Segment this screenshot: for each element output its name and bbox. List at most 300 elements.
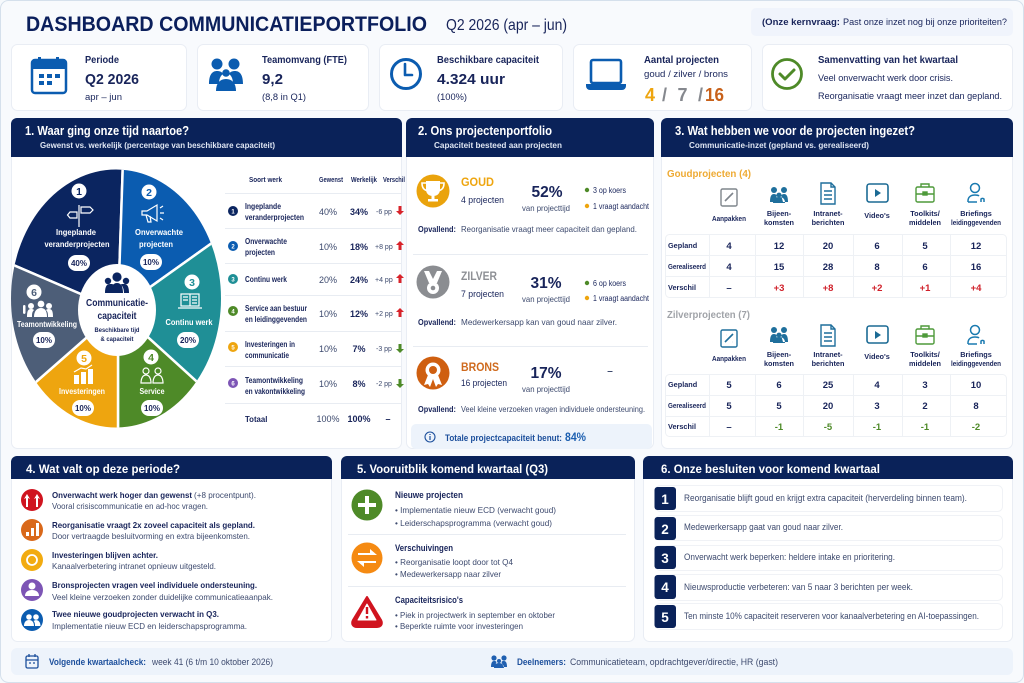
- row 1: 34%: [350, 207, 368, 217]
- row 5: 5: [231, 346, 235, 352]
- decision 4: 4: [661, 580, 669, 595]
- zilver table: –: [726, 422, 732, 433]
- label 1: 40%: [71, 259, 87, 268]
- panel 1: tijdsbesteding: [0, 118, 405, 448]
- goud column labels: Intranet-: [813, 209, 843, 218]
- panel 2: projectenportfolio: [406, 118, 654, 449]
- goud: [416, 174, 650, 234]
- panel 6: besluiten: [643, 456, 1013, 642]
- label 3: 20%: [180, 336, 196, 345]
- row 4: +2 pp: [375, 311, 393, 318]
- zilver: Medewerkersapp kan van goud naar zilver.: [461, 317, 617, 327]
- panel 1 header: [11, 118, 402, 157]
- total row: Totaal: [245, 415, 267, 424]
- icon: briefing: [968, 184, 984, 202]
- panel 3: communicatie-inzet: [661, 118, 1013, 448]
- panel 3 header: 3. Wat hebben we voor de projecten ingezet?: [675, 124, 915, 138]
- panel 2 header: Capaciteit besteed aan projecten: [434, 141, 562, 150]
- zilver table: 3: [922, 380, 928, 391]
- goud table: [665, 234, 1006, 298]
- stat card: samenvatting: Veel onverwacht werk door crisis.: [818, 73, 953, 83]
- label 4: [140, 350, 165, 416]
- total capacity callout: Totale projectcapaciteit benut:: [445, 433, 562, 443]
- table header row: Verschil: [383, 175, 405, 184]
- item 3: Investeringen blijven achter.: [52, 550, 158, 560]
- row 5: -3 pp: [376, 346, 392, 353]
- row 2: projecten: [245, 248, 275, 257]
- panel 4: wat valt op: [11, 456, 332, 642]
- zilver: [416, 266, 650, 327]
- nieuwe projecten: Nieuwe projecten: [395, 490, 463, 500]
- key question callout: (Onze kernvraag:: [762, 17, 840, 28]
- decision 4: Nieuwsproductie verbeteren: van 5 naar 3 berichten per week.: [684, 582, 913, 592]
- zilver table: Gerealiseerd: [668, 401, 706, 410]
- goud table: 4: [726, 262, 732, 273]
- row 6: 6: [231, 382, 235, 388]
- table header row: Soort werk: [249, 175, 283, 184]
- row 3: 24%: [350, 275, 368, 285]
- row 1: 40%: [319, 207, 337, 217]
- key question callout: [751, 8, 1013, 36]
- footer bar: Volgende kwartaalcheck:: [49, 657, 146, 667]
- panel 5: vooruitblik: [341, 456, 635, 642]
- stat card: capaciteit: [380, 44, 562, 110]
- goud table: 5: [922, 241, 928, 252]
- item 5: Twee nieuwe goudprojecten verwacht in Q3.: [52, 609, 219, 619]
- zilver column labels: Toolkits/: [910, 350, 940, 359]
- item 1: Vooral crisiscommunicatie en ad-hoc vragen.: [52, 501, 208, 511]
- row 2: 10%: [319, 242, 337, 252]
- row 1: -6 pp: [376, 209, 392, 216]
- label 4: 10%: [144, 404, 160, 413]
- zilver table: 5: [726, 401, 732, 412]
- verschuivingen: Verschuivingen: [395, 543, 453, 553]
- goud table: 12: [774, 241, 784, 252]
- goud: 1 vraagt aandacht: [593, 202, 650, 211]
- stat card: aantal projecten: 4: [645, 85, 655, 105]
- zilver: van projecttijd: [522, 294, 570, 304]
- icon: trophy: [416, 174, 450, 208]
- label 4: Service: [140, 387, 165, 396]
- nieuwe projecten: [352, 490, 556, 528]
- zilver table: 2: [922, 401, 928, 412]
- stat card: samenvatting: Samenvatting van het kwartaal: [818, 55, 958, 66]
- label 1: Ingeplande: [56, 228, 97, 237]
- label 2: 10%: [143, 258, 159, 267]
- zilver table: -1: [775, 422, 784, 433]
- icon: toolkit: [916, 184, 934, 202]
- row 2: [228, 237, 404, 257]
- stat card: samenvatting: [762, 44, 1012, 110]
- total row: –: [385, 414, 391, 424]
- zilver table: 5: [726, 380, 732, 391]
- row 4: 4: [231, 310, 235, 316]
- icon: rosette: [416, 356, 450, 390]
- footer bar: week 41 (6 t/m 10 oktober 2026): [151, 657, 273, 667]
- zilver: 7 projecten: [461, 289, 504, 300]
- goud table: 15: [774, 262, 785, 273]
- zilver: 1 vraagt aandacht: [593, 294, 650, 303]
- item 4: Veel kleine verzoeken zonder duidelijke communicatieaanpak.: [52, 592, 273, 602]
- title: DASHBOARD COMMUNICATIEPORTFOLIO: [26, 12, 427, 36]
- goud table: 4: [726, 241, 732, 252]
- label 5: 5: [81, 353, 87, 365]
- panel 3 header: [661, 118, 1013, 157]
- row 6: Teamontwikkeling: [245, 376, 303, 385]
- item 1: (+8 procentpunt).: [194, 490, 256, 500]
- zilver table: 4: [874, 380, 880, 391]
- icon: bijeenkomsten zilver: [770, 327, 788, 343]
- decision 3: [654, 546, 1002, 570]
- row 2: +8 pp: [375, 244, 393, 251]
- zilver table: 10: [971, 380, 981, 391]
- stat card: periode: [12, 44, 186, 110]
- icon: laptop: [586, 60, 626, 90]
- icon: toolkit zilver: [916, 326, 934, 344]
- zilver: 6 op koers: [593, 279, 626, 288]
- zilver column labels: Briefings: [960, 350, 992, 359]
- row 6: 10%: [319, 379, 337, 389]
- icon: medal: [416, 266, 450, 298]
- label 2: projecten: [139, 240, 173, 249]
- goud table: Gerealiseerd: [668, 262, 706, 271]
- footer bar: Communicatieteam, opdrachtgever/directie, HR (gast): [570, 657, 778, 667]
- zilver column labels: komsten: [764, 359, 794, 368]
- decision 3: Onverwacht werk beperken: heldere intake en prioritering.: [684, 552, 895, 562]
- panel 6 header: 6. Onze besluiten voor komend kwartaal: [661, 462, 880, 476]
- label 6: 10%: [36, 336, 52, 345]
- zilver table: [665, 374, 1006, 437]
- label 2: 2: [146, 187, 152, 199]
- capaciteitsrisico's: [352, 595, 555, 631]
- decision 2: 2: [661, 522, 669, 537]
- total row: 100%: [347, 414, 371, 424]
- label 6: 6: [31, 287, 37, 299]
- row 5: 10%: [319, 344, 337, 354]
- goud: van projecttijd: [522, 203, 570, 213]
- row 4: 10%: [319, 309, 337, 319]
- zilver table: -5: [824, 422, 833, 433]
- stat card: periode: apr – jun: [85, 92, 122, 102]
- segment 3: [148, 242, 221, 382]
- zilver table: -1: [921, 422, 930, 433]
- goud table: 28: [823, 262, 833, 273]
- stat card: aantal projecten: Aantal projecten: [644, 55, 719, 66]
- row 3: 20%: [319, 275, 337, 285]
- stat card: periode: Periode: [85, 55, 120, 66]
- row 1: [228, 202, 404, 222]
- icon: aanpakken zilver: [721, 330, 737, 347]
- zilver: ZILVER: [461, 269, 497, 283]
- label 5: Investeringen: [59, 387, 105, 396]
- footer bar: Deelnemers:: [517, 657, 566, 667]
- goud: 4 projecten: [461, 195, 504, 206]
- item 5: Implementatie nieuw ECD en leiderschapsprogramma.: [52, 621, 247, 631]
- row 1: veranderprojecten: [245, 213, 304, 222]
- decision 4: [654, 574, 1002, 600]
- row 6: 8%: [352, 379, 366, 389]
- table: soort werk: [225, 175, 405, 424]
- nieuwe projecten: • Leiderschapsprogramma (verwacht goud): [395, 518, 552, 528]
- row 6: -2 pp: [376, 381, 392, 388]
- panel 4 header: [11, 456, 332, 479]
- icon: intranet zilver: [821, 325, 835, 346]
- row 4: en leidinggevenden: [245, 315, 307, 324]
- goudprojecten heading: Goudprojecten (4): [667, 168, 751, 180]
- row 2: 18%: [350, 242, 368, 252]
- row 3: 3: [231, 278, 235, 284]
- goud: 3 op koers: [593, 186, 626, 195]
- segment 4: [118, 336, 197, 428]
- goud column labels: berichten: [812, 218, 844, 227]
- label 1: [44, 184, 110, 271]
- stat card: teamomvang: Teamomvang (FTE): [262, 55, 347, 66]
- goud table: 20: [823, 241, 833, 252]
- decision 1: [654, 486, 1002, 512]
- row 4: Service aan bestuur: [245, 304, 307, 313]
- row 1: 1: [231, 210, 235, 216]
- table header row: [249, 175, 405, 184]
- zilver column labels: Bijeen-: [767, 350, 792, 359]
- brons: 17%: [530, 365, 562, 382]
- goud column labels: Aanpakken: [712, 214, 746, 223]
- goud column labels: Bijeen-: [767, 209, 792, 218]
- capaciteitsrisico's: • Beperkte ruimte voor investeringen: [395, 621, 523, 631]
- brons: Veel kleine verzoeken vragen individuele ondersteuning.: [461, 404, 645, 414]
- decision 1: Reorganisatie blijft goud en krijgt extra capaciteit (herverdeling binnen team).: [684, 493, 967, 503]
- goud table: +8: [823, 283, 833, 294]
- zilverprojecten heading: Zilverprojecten (7): [667, 309, 750, 321]
- decision 5: Ten minste 10% capaciteit reserveren voor kanaalverbetering en AI-toepassingen.: [684, 611, 979, 621]
- goud column labels: [712, 209, 1001, 227]
- zilver table: Verschil: [668, 422, 696, 431]
- row 4: [228, 304, 404, 324]
- panel 3 header: Communicatie-inzet (gepland vs. gerealiseerd): [689, 141, 869, 150]
- icon: video zilver: [867, 326, 888, 343]
- table header row: Gewenst: [319, 175, 343, 184]
- brons: –: [607, 366, 613, 377]
- goud: GOUD: [461, 175, 494, 189]
- total capacity callout: 84%: [565, 432, 586, 444]
- goud table: +4: [971, 283, 982, 294]
- goud table: Verschil: [668, 283, 696, 292]
- brons: 16 projecten: [461, 378, 507, 389]
- decision 2: [654, 516, 1002, 540]
- item 3: [21, 549, 216, 571]
- item 1: [21, 489, 256, 511]
- panel 4 header: 4. Wat valt op deze periode?: [26, 462, 180, 476]
- centre circle: Beschikbare tijd: [94, 327, 140, 334]
- zilver table: Gepland: [668, 380, 697, 389]
- row 3: [228, 274, 404, 285]
- icon: footer calendar: [26, 654, 38, 668]
- goud column labels: Video's: [864, 211, 890, 220]
- icon: check: [772, 60, 802, 88]
- goud table: +1: [920, 283, 931, 294]
- goud table: Gepland: [668, 241, 697, 250]
- row 5: communicatie: [245, 351, 290, 360]
- segment 5: [36, 339, 120, 428]
- stat card: teamomvang: (8,8 in Q1): [262, 92, 306, 102]
- verschuivingen: [352, 542, 513, 579]
- goud table: 16: [971, 262, 981, 273]
- zilver table: 20: [823, 401, 833, 412]
- centre circle: Communicatie-: [86, 298, 148, 309]
- goud column labels: middelen: [909, 218, 941, 227]
- panel 2 header: 2. Ons projectenportfolio: [418, 124, 552, 138]
- stat card: aantal projecten: [574, 44, 752, 110]
- item 2: [21, 519, 255, 541]
- label 3: 3: [189, 277, 195, 289]
- segment 1: [14, 170, 123, 293]
- row 3: Continu werk: [245, 275, 288, 284]
- label 5: 10%: [75, 404, 91, 413]
- stat card: samenvatting: Reorganisatie vraagt meer inzet dan gepland.: [818, 91, 1002, 101]
- label 6: Teamontwikkeling: [17, 320, 77, 329]
- decision 5: 5: [661, 610, 669, 625]
- item 4: Bronsprojecten vragen veel individuele ondersteuning.: [52, 580, 257, 590]
- row 5: Investeringen in: [245, 340, 295, 349]
- goud column labels: Toolkits/: [910, 209, 940, 218]
- centre circle: capaciteit: [98, 311, 137, 322]
- panel 1 header: 1. Waar ging onze tijd naartoe?: [25, 123, 189, 138]
- total row: 100%: [316, 414, 340, 424]
- item 3: Kanaalverbetering intranet opnieuw uitgesteld.: [52, 561, 216, 571]
- brons: van projecttijd: [522, 384, 570, 394]
- goud table: 8: [874, 262, 880, 273]
- stat card: capaciteit: (100%): [437, 92, 467, 102]
- stat card: teamomvang: 9,2: [262, 71, 283, 88]
- centre circle: [78, 264, 156, 356]
- item 4: [21, 579, 273, 602]
- zilver table: 6: [776, 380, 782, 391]
- stat card: aantal projecten: goud / zilver / brons: [644, 69, 729, 79]
- icon: aanpakken: [721, 189, 737, 206]
- zilver: Opvallend:: [418, 317, 456, 327]
- goud table: +3: [774, 283, 784, 294]
- centre circle: & capaciteit: [100, 336, 134, 343]
- brons: [416, 356, 645, 414]
- zilver column labels: leidinggevenden: [951, 359, 1001, 368]
- label 4: 4: [148, 352, 154, 364]
- label 1: 1: [76, 186, 82, 198]
- nieuwe projecten: • Implementatie nieuw ECD (verwacht goud): [395, 505, 556, 515]
- decision 1: 1: [661, 492, 669, 507]
- zilver table: 8: [973, 401, 979, 412]
- stat card: periode: Q2 2026: [85, 71, 139, 88]
- verschuivingen: • Medewerkersapp naar zilver: [395, 569, 501, 579]
- period subtitle: Q2 2026 (apr – jun): [446, 17, 567, 34]
- zilver column labels: Intranet-: [813, 350, 843, 359]
- panel 6 header: [643, 456, 1013, 479]
- icon: bijeenkomsten: [770, 187, 788, 203]
- label 3: [166, 274, 213, 348]
- goud: Reorganisatie vraagt meer capaciteit dan gepland.: [461, 224, 637, 234]
- footer bar: [11, 648, 1013, 675]
- decision 5: [654, 604, 1002, 630]
- decision 3: 3: [661, 551, 669, 566]
- zilver: 31%: [530, 275, 562, 292]
- row 2: Onverwachte: [245, 237, 288, 246]
- total row: [245, 414, 391, 424]
- label 2: [135, 184, 184, 270]
- item 2: Door vertraagde besluitvorming en extra bijeenkomsten.: [52, 531, 250, 541]
- goud table: 12: [971, 241, 981, 252]
- zilver table: 5: [776, 401, 782, 412]
- goud column labels: leidinggevenden: [951, 218, 1001, 227]
- pie chart: [11, 170, 221, 428]
- zilver table: -1: [873, 422, 882, 433]
- stat card: aantal projecten: 16: [705, 85, 724, 105]
- stat card: capaciteit: 4.324 uur: [437, 71, 505, 88]
- item 1: Onverwacht werk hoger dan gewenst: [52, 490, 192, 500]
- item 5: [21, 609, 247, 631]
- decision 2: Medewerkersapp gaat van goud naar zilver.: [684, 522, 843, 532]
- row 6: [228, 376, 404, 396]
- goud: 52%: [531, 184, 563, 201]
- brons: BRONS: [461, 360, 499, 374]
- icon: video: [867, 184, 888, 202]
- icon: clock: [392, 60, 420, 88]
- icon: calendar: [32, 57, 66, 93]
- segment 6: [11, 264, 87, 383]
- stat card: aantal projecten: / 7 /: [662, 85, 703, 105]
- goud table: +2: [872, 283, 882, 294]
- goud table: 6: [922, 262, 928, 273]
- panel 2 header: [406, 118, 654, 157]
- panel 5 header: [341, 456, 635, 479]
- zilver table: 3: [874, 401, 880, 412]
- row 5: [228, 340, 404, 360]
- row 6: en vakontwikkeling: [245, 387, 305, 396]
- label 2: Onverwachte: [135, 228, 184, 237]
- goud table: –: [726, 283, 732, 294]
- icon: footer team: [491, 655, 507, 668]
- row 5: 7%: [352, 344, 366, 354]
- stat card: capaciteit: Beschikbare capaciteit: [437, 55, 540, 66]
- label 1: veranderprojecten: [44, 240, 110, 249]
- zilver column labels: Aanpakken: [712, 354, 746, 363]
- goud: Opvallend:: [418, 224, 456, 234]
- row 2: 2: [231, 244, 235, 250]
- row 3: +4 pp: [375, 277, 393, 284]
- stat card: teamomvang: [198, 44, 368, 110]
- capaciteitsrisico's: Capaciteitsrisico's: [395, 595, 463, 605]
- panel 1 header: Gewenst vs. werkelijk (percentage van beschikbare capaciteit): [40, 141, 275, 150]
- capaciteitsrisico's: • Piek in projectwerk in september en oktober: [395, 610, 555, 620]
- total capacity callout: [411, 424, 652, 449]
- panel 5 header: 5. Vooruitblik komend kwartaal (Q3): [357, 462, 548, 476]
- zilver table: -2: [972, 422, 980, 433]
- row 1: Ingeplande: [245, 202, 282, 211]
- label 5: [59, 350, 105, 416]
- table header row: Werkelijk: [351, 175, 378, 184]
- zilver column labels: berichten: [812, 359, 844, 368]
- item 2: Reorganisatie vraagt 2x zoveel capaciteit als gepland.: [52, 520, 255, 530]
- verschuivingen: • Reorganisatie loopt door tot Q4: [395, 557, 513, 567]
- zilver table: 25: [823, 380, 834, 391]
- goud table: 6: [874, 241, 880, 252]
- key question callout: Past onze inzet nog bij onze prioriteiten?: [843, 17, 1007, 28]
- zilver column labels: middelen: [909, 359, 941, 368]
- icon: team: [209, 58, 243, 91]
- zilver column labels: [712, 350, 1001, 368]
- icon: briefing zilver: [968, 326, 984, 344]
- icon: intranet: [821, 183, 835, 204]
- row 4: 12%: [350, 309, 368, 319]
- goud column labels: komsten: [764, 218, 794, 227]
- goud column labels: Briefings: [960, 209, 992, 218]
